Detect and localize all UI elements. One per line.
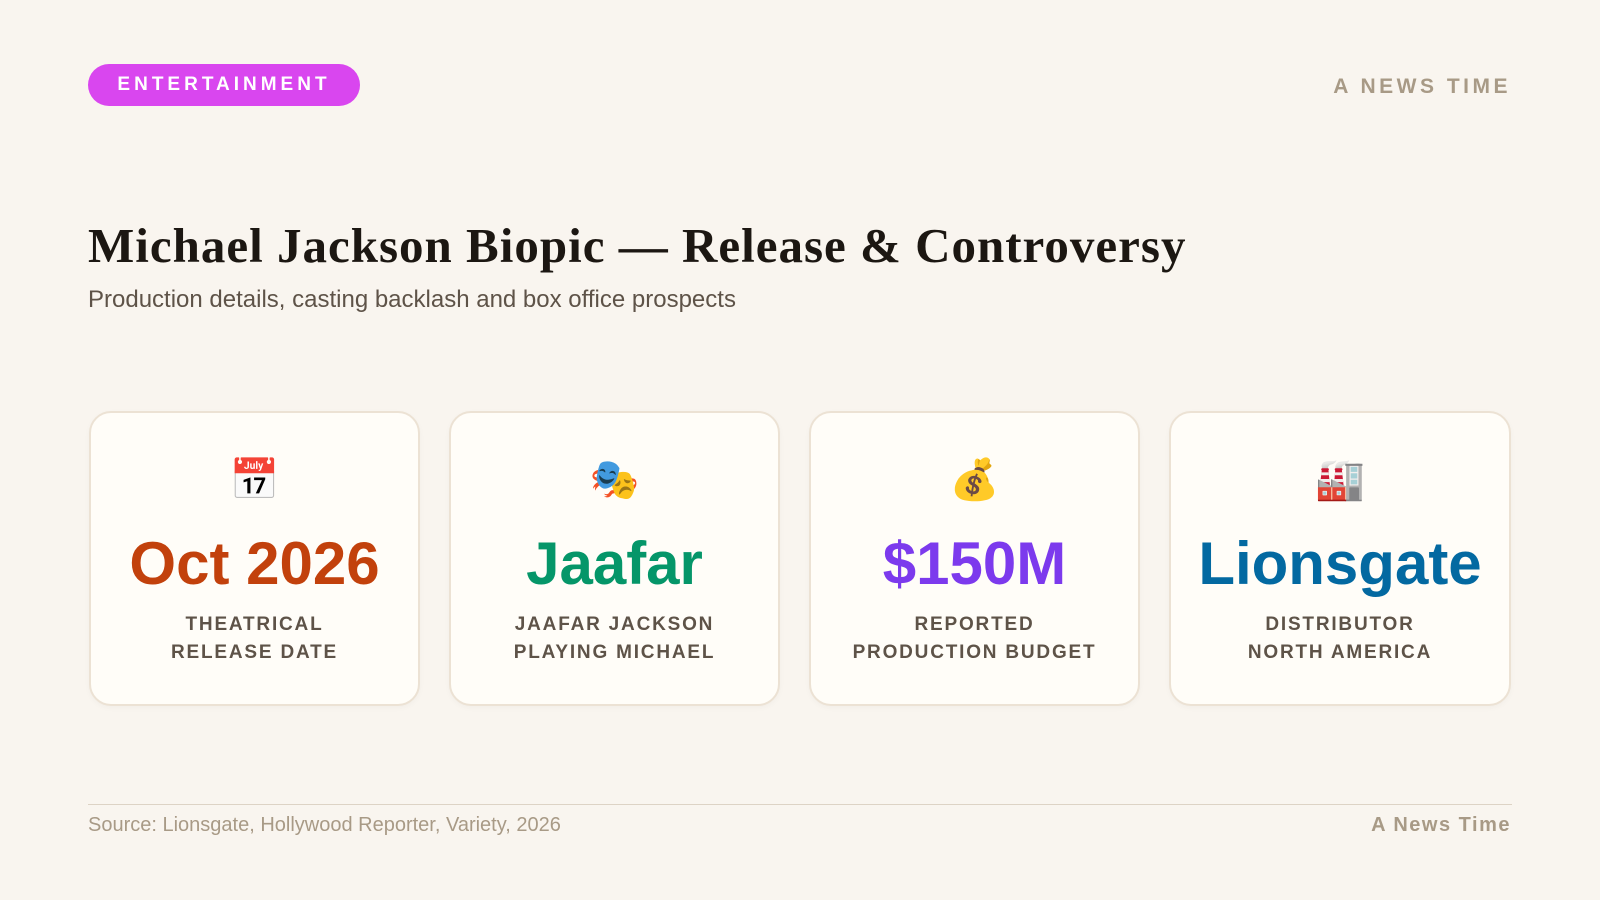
icon: money bag: 💰 [950,458,999,502]
icon: calendar: 📅 [230,458,279,502]
stat: budget: $150M [883,530,1066,597]
card: casting [449,411,780,706]
category pill: ENTERTAINMENT [117,74,331,95]
label: release: RELEASE DATE [171,642,338,663]
label: budget [853,614,1096,663]
card: budget [809,411,1140,706]
title: Michael Jackson Biopic — Release & Controversy [88,218,1186,273]
category pill [88,64,360,106]
footer brand: A News Time [1371,814,1511,836]
label: distributor: NORTH AMERICA [1248,642,1432,663]
icon: factory: 🏭 [1315,458,1365,502]
subtitle: Production details, casting backlash and box office prospects [88,286,736,313]
label: release: THEATRICAL [186,614,323,635]
label: budget: PRODUCTION BUDGET [853,642,1096,663]
label: casting: JAAFAR JACKSON [515,614,714,635]
stat: casting: Jaafar [526,530,703,597]
card: release date [89,411,420,706]
label: distributor: DISTRIBUTOR [1265,614,1415,635]
source: Source: Lionsgate, Hollywood Reporter, Variety, 2026 [88,814,561,836]
label: casting: PLAYING MICHAEL [514,642,715,663]
icon: theater masks: 🎭 [590,458,639,502]
brand: A NEWS TIME [1333,75,1511,98]
card: distributor [1169,411,1511,706]
stat: release: Oct 2026 [129,530,380,597]
label: casting [514,614,715,663]
stat: distributor: Lionsgate [1198,530,1482,597]
label: distributor [1248,614,1432,663]
label: budget: REPORTED [915,614,1034,635]
label: release [171,614,338,663]
